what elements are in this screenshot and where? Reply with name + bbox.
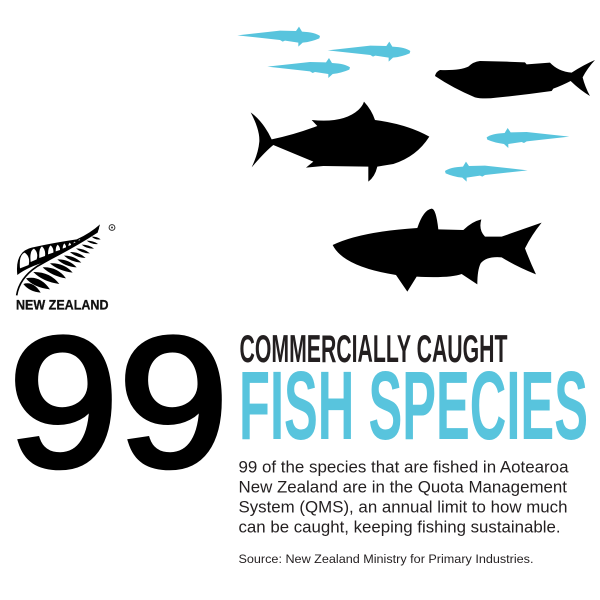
icon: blue fish 5 (445, 162, 528, 182)
text block: description (238, 459, 569, 537)
text block: description: New Zealand are in the Quota Management (238, 479, 567, 497)
icon: blue fish 3 (267, 58, 350, 78)
icon: black mullet (333, 209, 542, 292)
logo: New Zealand silver fern (16, 224, 115, 312)
big number 99: 99 (8, 300, 228, 506)
icon: fern (17, 224, 101, 295)
text: source: Source: New Zealand Ministry for Primary Industries. (238, 552, 534, 566)
text block: description: System (QMS), an annual limit to how much (238, 499, 568, 517)
icon: trademark mark (109, 225, 115, 230)
icon: black mackerel (435, 60, 595, 98)
icon: blue fish 2 (328, 42, 410, 62)
icon: blue fish 4 (487, 128, 569, 148)
icon: black tuna (251, 102, 429, 182)
text block: description: 99 of the species that are fished in Aotearoa (238, 459, 569, 477)
text block: description: can be caught, keeping fishing sustainable. (238, 519, 560, 537)
text: NEW ZEALAND: NEW ZEALAND (16, 298, 109, 312)
icon: blue fish 1 (237, 27, 320, 47)
